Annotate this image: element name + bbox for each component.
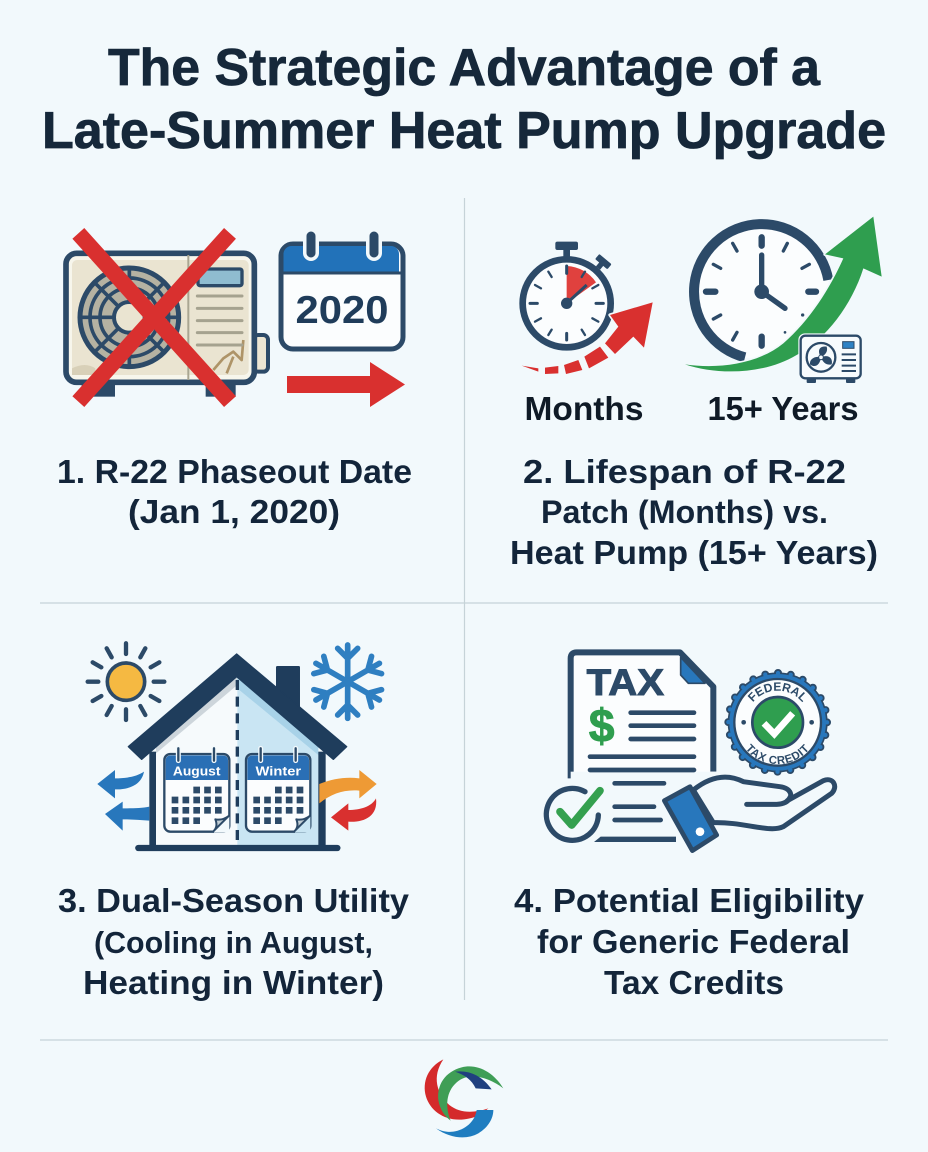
icon: tax document [571, 652, 717, 842]
icon: orange and red arrows [319, 770, 377, 831]
icon: crossed-out old AC unit [66, 233, 268, 402]
heading: tax credit label [514, 882, 865, 1001]
icon: 2020 calendar [281, 236, 403, 349]
heading: dual-season label: (Cooling in August, [94, 925, 373, 960]
heading: dual-season label: 3. Dual-Season Utility [58, 882, 410, 919]
heading: lifespan label: Heat Pump (15+ Years) [510, 534, 878, 571]
text: Months: Months [524, 390, 644, 427]
icon: house with two calendars: August [173, 763, 221, 778]
heading: lifespan label [510, 453, 878, 571]
heading: lifespan label: Patch (Months) vs. [541, 494, 828, 530]
icon: red arrow [287, 362, 405, 407]
icon: stopwatch with red dashed arrow [522, 242, 653, 374]
title: Late-Summer Heat Pump Upgrade [42, 102, 886, 160]
icon: tax document: TAX [587, 661, 664, 703]
icon: open hand with cuff [664, 777, 835, 851]
heading: dual-season label: Heating in Winter) [83, 964, 384, 1001]
heading: phaseout label [57, 453, 412, 530]
icon: clock with green arrow and heat pump [685, 217, 882, 383]
icon: federal tax credit seal: TAX CREDIT [747, 744, 808, 764]
icon: blue outgoing arrows [97, 770, 149, 831]
heading: tax credit label: for Generic Federal [537, 923, 850, 960]
heading: lifespan label: 2. Lifespan of R-22 [523, 453, 846, 490]
panel: lifespan [510, 217, 882, 571]
heading: dual-season label [58, 882, 410, 1001]
icon: snowflake [311, 645, 384, 718]
icon: federal tax credit seal [724, 669, 831, 776]
title [42, 39, 886, 160]
icon: sun [88, 643, 164, 720]
title: The Strategic Advantage of a [108, 39, 821, 97]
heading: phaseout label: 1. R-22 Phaseout Date [57, 453, 412, 490]
icon: federal tax credit seal: FEDERAL [748, 682, 805, 702]
heading: tax credit label: Tax Credits [604, 964, 784, 1001]
text: 15+ Years: 15+ Years [708, 390, 858, 427]
heading: phaseout label: (Jan 1, 2020) [128, 493, 340, 530]
icon: house with two calendars: Winter [255, 763, 301, 778]
icon: house with two calendars [128, 654, 347, 848]
panel: dual-season utility [58, 643, 410, 1001]
icon: green check in circle [546, 788, 600, 840]
icon: footer logo [425, 1059, 503, 1137]
panel: federal tax credits [514, 649, 865, 1001]
panel: R-22 phaseout date [57, 233, 412, 530]
icon: tax document: $ [589, 700, 614, 752]
icon: 2020 calendar: 2020 [296, 289, 388, 332]
heading: tax credit label: 4. Potential Eligibility [514, 882, 865, 919]
